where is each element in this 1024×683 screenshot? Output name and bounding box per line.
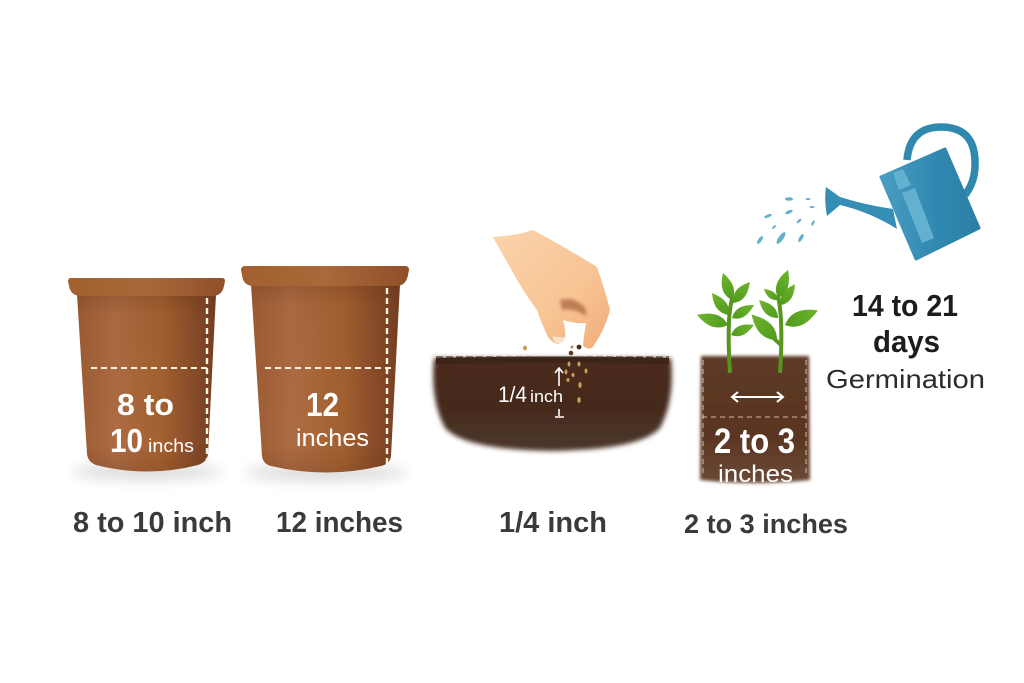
bottom labels: 2 to 3 inches bbox=[684, 509, 848, 539]
pot label: inchs bbox=[148, 436, 194, 456]
germination text: days bbox=[873, 324, 940, 359]
pot label bbox=[110, 387, 194, 459]
pot label: 10 bbox=[110, 422, 143, 459]
soil block with seedlings bbox=[695, 268, 821, 488]
plant: left seedling bbox=[695, 271, 757, 373]
handle bbox=[907, 127, 975, 195]
dashed measure lines bbox=[265, 288, 392, 466]
bottom labels: 8 to 10 inch bbox=[73, 507, 232, 539]
dashed spacing lines bbox=[702, 360, 808, 476]
spout bbox=[825, 187, 897, 229]
pot label bbox=[296, 386, 369, 452]
depth label: inch bbox=[530, 387, 563, 406]
soil bed with seeds bbox=[433, 345, 672, 451]
soil label bbox=[714, 422, 795, 488]
depth label: 1/4 bbox=[498, 382, 527, 407]
hand dropping seeds bbox=[493, 230, 610, 349]
soil label: 2 to 3 bbox=[714, 422, 795, 461]
germination text: 14 to 21 bbox=[852, 288, 958, 323]
germination text: Germination bbox=[826, 364, 985, 394]
pot label: 12 bbox=[306, 386, 339, 423]
arrow: spacing bbox=[732, 392, 783, 402]
pot label: 8 to bbox=[117, 387, 174, 422]
dashed measure lines bbox=[91, 298, 209, 467]
highlight bbox=[893, 169, 934, 243]
bottom labels bbox=[73, 507, 848, 539]
seeds bbox=[523, 346, 588, 403]
soil label: inches bbox=[718, 461, 793, 488]
pot: 8 to 10 inch bbox=[68, 278, 225, 479]
pot: 12 inches bbox=[241, 266, 409, 480]
watering can bbox=[825, 127, 979, 259]
pot label: inches bbox=[296, 425, 369, 452]
depth label bbox=[498, 368, 564, 417]
bottom labels: 1/4 inch bbox=[499, 507, 607, 539]
water drops bbox=[756, 197, 815, 245]
body bbox=[881, 149, 979, 259]
bottom labels: 12 inches bbox=[276, 507, 403, 539]
germination text bbox=[826, 288, 985, 394]
plant: right seedling bbox=[747, 268, 821, 373]
